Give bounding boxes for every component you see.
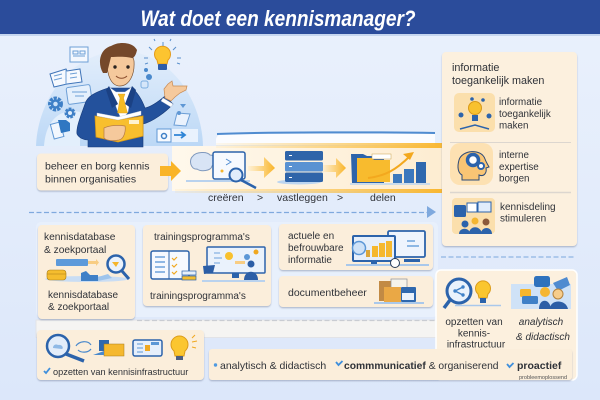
process labels: > — [337, 192, 343, 204]
panel: kennisdatabase card — [38, 225, 135, 319]
icon: server stack — [277, 151, 323, 184]
text: opzetten van kennisinfrastructuur: infrastructuur — [447, 340, 506, 350]
panel: actuele informatie card: informatie — [288, 255, 332, 266]
arrow: bottom to kennisdeling — [175, 183, 456, 200]
panel: actuele informatie card: actuele en — [288, 231, 334, 242]
process labels: vastleggen — [277, 192, 328, 204]
shirt and collar — [109, 87, 132, 120]
icon: gears — [50, 98, 74, 117]
panel: actuele informatie card: befrouwbare — [288, 243, 344, 254]
panel: lower-right strip: analytisch & didactisch — [220, 360, 326, 372]
panel: kennisdatabase card: kennisdatabase — [48, 290, 118, 301]
item: interne expertise borgen: borgen — [499, 174, 530, 184]
panel: kennisdatabase card: & zoekportaal — [44, 245, 106, 256]
panel: documentbeheer card: documentbeheer — [288, 287, 367, 299]
icon: database and search — [45, 256, 129, 282]
panel: opzetten van kennisinfrastructuur: opzetten van kennisinfrastructuur — [53, 367, 188, 377]
dashed arrow — [29, 206, 436, 218]
dashed divider right — [441, 256, 575, 258]
icon: monitors with chart — [346, 231, 429, 268]
item: informatie toegankelijk maken: maken — [499, 120, 528, 132]
panel: trainingsprogramma's card — [143, 225, 271, 306]
panel: opzetten van kennisinfrastructuur — [37, 330, 204, 380]
text: opzetten van kennisinfrastructuur — [445, 317, 506, 350]
panel: documentbeheer card — [279, 276, 433, 307]
yellow book — [95, 116, 143, 142]
illustration: knowledge manager with book — [36, 39, 203, 147]
item: kennisdeling stimuleren: kennisdeling — [500, 202, 556, 213]
icon: magnifier and bulb — [444, 279, 501, 308]
text: opzetten van kennisinfrastructuur: kennis- — [458, 328, 490, 340]
man jacket — [77, 88, 173, 147]
icon: folder and rising bars — [350, 152, 430, 184]
process labels — [208, 192, 396, 204]
item: interne expertise borgen — [450, 143, 539, 185]
holding hand — [104, 125, 125, 141]
item: kennisdeling stimuleren — [452, 198, 556, 234]
arrow: intro to create — [160, 161, 181, 181]
panel: beheer en borg kennis — [37, 154, 168, 190]
process labels: delen — [370, 192, 396, 204]
panel: lower-right strip: commmunicatief & organiserend — [344, 361, 499, 372]
icon: checklist and screen — [151, 247, 265, 281]
panel: trainingsprogramma's card: trainingsprogramma's — [154, 232, 250, 243]
icon: process tile — [157, 129, 198, 142]
icon: open book — [50, 69, 82, 87]
arrow: top to expertise — [216, 137, 455, 154]
item: interne expertise borgen: interne — [499, 150, 530, 161]
panel: beheer en borg kennis: beheer en borg kennis — [45, 160, 150, 172]
icon: discussing people — [511, 276, 571, 309]
icon: infrastructure row — [47, 335, 197, 361]
icon: document — [70, 47, 88, 62]
icon: floating dots — [141, 68, 152, 88]
icon: note tile — [174, 104, 190, 126]
cuff — [161, 98, 173, 107]
item: informatie toegankelijk maken — [454, 93, 551, 132]
panel: lower-right strip: proactief — [517, 360, 562, 372]
panel: beheer en borg kennis: binnen organisaties — [45, 174, 136, 186]
arrow: create to store — [248, 157, 275, 178]
jacket lapels — [106, 86, 136, 108]
heading: informatie toegankelijk maken: toegankelijk maken — [452, 75, 544, 87]
heading: informatie toegankelijk maken: informatie — [452, 62, 499, 74]
icon: cloud screen magnifier — [186, 152, 256, 188]
icon: small documents — [50, 120, 70, 139]
raised hand — [164, 81, 187, 101]
icon: card — [66, 84, 92, 105]
title bar — [0, 0, 600, 36]
heading: informatie toegankelijk maken — [452, 62, 544, 87]
panel: trainingsprogramma's card: trainingsprogramma's — [150, 291, 246, 302]
item: informatie toegankelijk maken: toegankelijk — [499, 109, 551, 120]
icon: light bulb — [144, 39, 181, 70]
text: analytisch en didactisch: & didactisch — [516, 332, 570, 343]
panel: lower-right strip — [209, 349, 572, 381]
man head — [107, 53, 134, 86]
panel: actuele informatie card — [279, 224, 433, 270]
text: analytisch en didactisch: analytisch — [519, 317, 564, 328]
process band — [172, 132, 456, 191]
tie — [118, 94, 128, 113]
panel: right column — [442, 52, 577, 246]
panel: lower-right strip: probleemoplossend — [519, 375, 567, 381]
arrow: store to share — [323, 158, 346, 178]
item: informatie toegankelijk maken: informatie — [499, 97, 543, 108]
panel: kennisdatabase card: kennisdatabase — [44, 232, 116, 243]
item: interne expertise borgen: expertise — [499, 162, 539, 173]
text: analytisch en didactisch — [516, 317, 570, 343]
icon: folder with files — [374, 279, 424, 303]
title bar: Wat doet een kennismanager? — [140, 6, 416, 31]
item: kennisdeling stimuleren: stimuleren — [500, 214, 546, 224]
panel: kennisdatabase card: & zoekportaal — [48, 302, 109, 313]
text: opzetten van kennisinfrastructuur: opzetten van — [445, 317, 503, 328]
process labels: > — [257, 192, 263, 204]
panel: bottom right — [436, 270, 577, 380]
process labels: creëren — [208, 192, 244, 204]
dashed divider lower — [137, 320, 435, 322]
panel: lane background — [36, 222, 438, 338]
